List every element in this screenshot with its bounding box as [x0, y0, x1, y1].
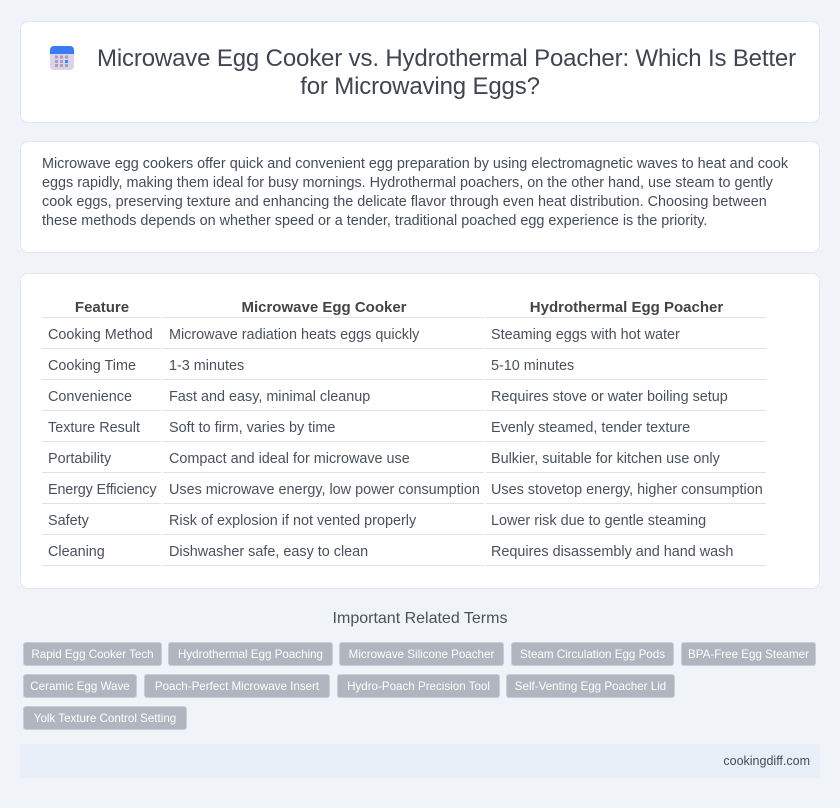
footer source: cookingdiff.com: [723, 754, 810, 768]
row: texture result: [48, 420, 690, 436]
row: cooking method: Microwave radiation heats eggs quickly: [169, 327, 419, 343]
text block: introduction: these methods depends on whether speed or a tender, traditional poached egg experience is the priority.: [42, 213, 707, 229]
row: cooking time: 5-10 minutes: [491, 358, 574, 374]
panel: introduction: [20, 141, 820, 253]
tag: Hydrothermal Egg Poaching: [178, 648, 323, 661]
table header: Feature: [75, 299, 129, 316]
text block: introduction: [42, 156, 788, 229]
panel: comparison table: [20, 273, 820, 589]
comparison table: [42, 299, 766, 566]
text block: introduction: eggs rapidly, making them ideal for busy mornings. Hydrothermal poachers, on the other hand, use steam to gently: [42, 175, 773, 191]
tag: [337, 674, 500, 698]
row: safety: Risk of explosion if not vented properly: [169, 513, 416, 529]
tag: Microwave Silicone Poacher: [349, 648, 494, 661]
row: convenience: Fast and easy, minimal cleanup: [169, 389, 370, 405]
tag: [168, 642, 333, 666]
row: cleaning: [48, 544, 733, 560]
row: texture result: Evenly steamed, tender texture: [491, 420, 690, 436]
tag: Hydro-Poach Precision Tool: [347, 680, 490, 693]
row: cooking time: [48, 358, 574, 374]
title: [97, 45, 796, 100]
row: safety: Safety: [48, 513, 89, 529]
row: cleaning: Requires disassembly and hand wash: [491, 544, 733, 560]
row: energy efficiency: Energy Efficiency: [48, 482, 156, 498]
tag: [23, 674, 137, 698]
tag list: related terms: [23, 642, 816, 730]
row: portability: Bulkier, suitable for kitchen use only: [491, 451, 720, 467]
row: cooking method: [48, 327, 680, 343]
panel: title card: [20, 21, 820, 123]
tag: [511, 642, 674, 666]
row: cleaning: Dishwasher safe, easy to clean: [169, 544, 368, 560]
table header: [75, 299, 723, 316]
tag: [23, 706, 187, 730]
row: energy efficiency: Uses stovetop energy, higher consumption: [491, 482, 763, 498]
table header: Hydrothermal Egg Poacher: [530, 299, 723, 316]
footer bar: [20, 744, 820, 778]
row: cooking method: Steaming eggs with hot water: [491, 327, 680, 343]
title: for Microwaving Eggs?: [300, 73, 540, 100]
tag: [506, 674, 675, 698]
row: texture result: Soft to firm, varies by time: [169, 420, 335, 436]
row: energy efficiency: Uses microwave energy, low power consumption: [169, 482, 480, 498]
row: safety: Lower risk due to gentle steaming: [491, 513, 706, 529]
row: portability: Compact and ideal for microwave use: [169, 451, 410, 467]
text block: introduction: cook eggs, preserving texture and enhancing the delicate flavor through even heat distribution. Choosing between: [42, 194, 767, 210]
row: energy efficiency: [48, 482, 763, 498]
tag: Ceramic Egg Wave: [30, 680, 130, 693]
row: portability: [48, 451, 720, 467]
tag: Rapid Egg Cooker Tech: [31, 648, 154, 661]
tag: [681, 642, 816, 666]
title: Microwave Egg Cooker vs. Hydrothermal Poacher: Which Is Better: [97, 45, 796, 72]
row: texture result: Texture Result: [48, 420, 140, 436]
row: convenience: [48, 389, 728, 405]
tag: Yolk Texture Control Setting: [34, 712, 176, 725]
text block: introduction: Microwave egg cookers offer quick and convenient egg preparation by using electromagnetic waves to heat and cook: [42, 156, 788, 172]
row: convenience: Requires stove or water boiling setup: [491, 389, 728, 405]
tag: Steam Circulation Egg Pods: [520, 648, 665, 661]
tag: Self-Venting Egg Poacher Lid: [515, 680, 666, 693]
icon: calendar: [50, 46, 74, 70]
row: cleaning: Cleaning: [48, 544, 105, 560]
row: safety: [48, 513, 706, 529]
row: convenience: Convenience: [48, 389, 132, 405]
tag: [339, 642, 504, 666]
tag: Poach-Perfect Microwave Insert: [155, 680, 319, 693]
row: portability: Portability: [48, 451, 111, 467]
tag: BPA-Free Egg Steamer: [688, 648, 809, 661]
row: cooking time: Cooking Time: [48, 358, 136, 374]
heading: related terms: Important Related Terms: [333, 610, 507, 627]
tag: [144, 674, 330, 698]
table header: Microwave Egg Cooker: [241, 299, 407, 316]
row: cooking method: Cooking Method: [48, 327, 153, 343]
row: cooking time: 1-3 minutes: [169, 358, 244, 374]
tag: [23, 642, 162, 666]
